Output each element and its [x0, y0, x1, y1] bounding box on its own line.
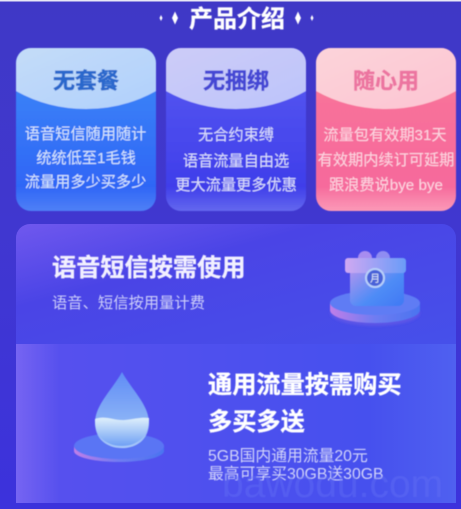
- body text: 随心用: [318, 127, 454, 194]
- panel: 无套餐: [16, 48, 156, 211]
- watermark: bawodu.com: [222, 463, 443, 506]
- heading: general data: [208, 372, 402, 436]
- heading: voice and SMS: 语音短信按需使用: [52, 255, 246, 282]
- body text: 无捆绑: 语音流量自由选: [183, 153, 289, 170]
- heading: 随心用: 随心用: [353, 68, 419, 94]
- body text: 无套餐: 流量用多少买多少: [25, 174, 146, 191]
- body text: 无捆绑: [175, 126, 297, 194]
- icon: right sparkles: [295, 12, 314, 24]
- icon: gift box on disc: [330, 251, 420, 326]
- subtext: general data: [208, 447, 384, 483]
- subtext: voice and SMS: 语音、短信按用量计费: [52, 295, 205, 312]
- body text: 随心用: 跟浪费说bye bye: [329, 177, 443, 194]
- body text: 无套餐: 语音短信随用随计: [25, 126, 146, 143]
- panel: 随心用: [316, 48, 456, 211]
- body text: 随心用: 流量包有效期31天: [323, 127, 447, 144]
- icon: left sparkles: [160, 12, 178, 24]
- body text: 随心用: 有效期内续订可延期: [318, 152, 454, 169]
- subtext: general data: 最高可享买30GB送30GB: [208, 465, 384, 483]
- panel: 无捆绑: [166, 48, 306, 211]
- body text: 无套餐: 统统低至1毛钱: [36, 150, 136, 167]
- icon: water drop on disc: [74, 372, 164, 462]
- subtext: general data: 5GB国内通用流量20元: [208, 447, 368, 465]
- heading: 无套餐: 无套餐: [53, 68, 119, 94]
- panel: general data: [16, 344, 456, 503]
- icon: gift box on disc: 月: [370, 273, 380, 285]
- body text: 无套餐: [25, 126, 146, 191]
- title text: 产品介绍: [189, 6, 285, 33]
- heading: 无捆绑: 无捆绑: [203, 68, 269, 94]
- body text: 无捆绑: 更大流量更多优惠: [175, 177, 297, 194]
- heading: general data: 多买多送: [208, 409, 305, 436]
- panel: voice and SMS: [16, 224, 456, 344]
- heading: general data: 通用流量按需购买: [208, 372, 402, 399]
- body text: 无捆绑: 无合约束缚: [198, 126, 274, 144]
